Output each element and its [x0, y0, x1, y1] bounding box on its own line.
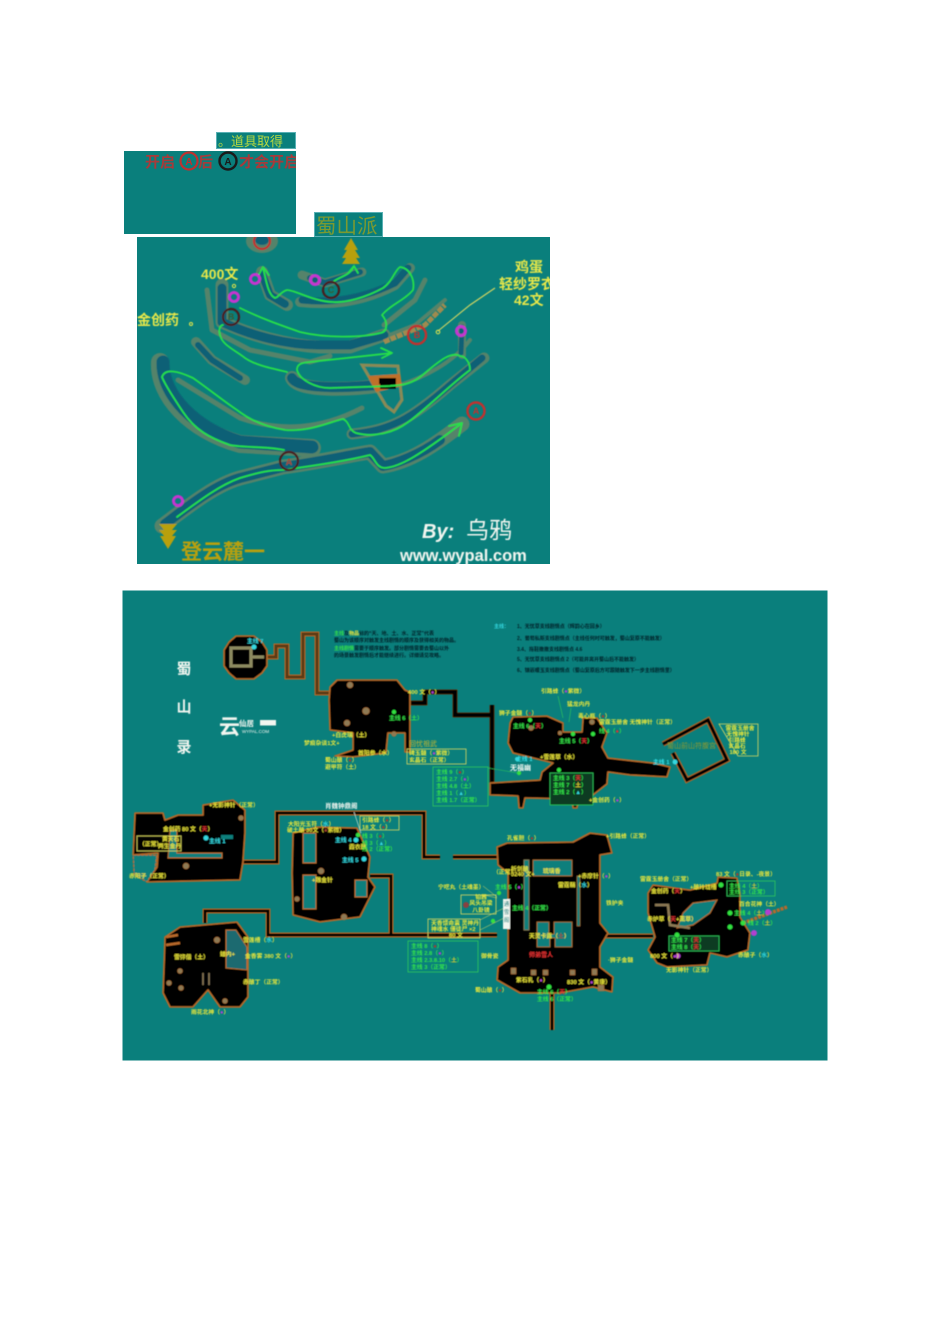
author signature: 乌鸦 — [466, 517, 512, 543]
room: upper west hall: 避甲符（土） — [325, 763, 360, 771]
switch markers: C — [328, 285, 335, 295]
room: upper central hall: 主线 1 — [653, 758, 670, 766]
room: central castle: 紫石乳（●） — [516, 976, 549, 984]
map title — [176, 661, 192, 756]
room: round chamber — [224, 636, 267, 679]
room: west hall — [129, 800, 358, 882]
room: upper west hall: 梦痕杂谈1文+ — [304, 739, 340, 747]
room: east cave: 线 2（土） — [748, 919, 776, 927]
room: upper central hall: 无福幽 — [510, 763, 531, 772]
room: east cave: 主线 3（正常） — [729, 888, 769, 896]
panel: item acquisition label: 。道具取得 — [218, 134, 283, 149]
room: central west hall: 主线 4 — [335, 836, 352, 844]
room: central castle: 风头吊梁 — [469, 899, 493, 907]
map title: 山 — [176, 699, 192, 716]
room: east cave: 赤酿子（水） — [738, 951, 773, 959]
room: central west hall: 线 3（●） — [362, 832, 388, 840]
item labels: 42文 — [514, 292, 544, 308]
room: east cave: 800 文（●） — [650, 952, 682, 960]
room: central castle: 阁 — [504, 916, 509, 924]
room: upper central hall: 毒心瓶（●） — [578, 712, 611, 720]
room: east cave: 主线 8（天） — [671, 943, 705, 951]
room: central castle: 3240 文+ — [511, 870, 535, 878]
room: upper central hall: 主线 1 — [516, 755, 533, 763]
panel: switch note: 开启 — [145, 154, 175, 171]
site logo: WYPAL.COM — [242, 729, 269, 734]
room: central castle: +赤摩针（●） — [578, 872, 614, 880]
room: central west hall: +雕金针 — [312, 876, 333, 884]
room: east cave: 主线 4（土） — [734, 909, 768, 917]
room: central castle: 天香馈命囊 灵神丹 — [431, 919, 479, 927]
legend text — [334, 630, 459, 659]
room: central castle: 铂茜 — [475, 893, 487, 901]
site logo — [219, 716, 276, 739]
map title: 录 — [176, 739, 192, 756]
room: central castle: 师弟雪人 — [529, 951, 553, 959]
branch quest notes — [494, 623, 675, 674]
room: west hall: 肖魏钟鼎阁 — [325, 801, 358, 810]
room: south-west cave: 金香雾 380 文（●） — [245, 952, 296, 960]
room: east cave: +酿玲珑槽 — [690, 883, 717, 891]
room: upper central hall: 主线 3（天） — [553, 774, 587, 782]
room: south-west cave — [163, 922, 296, 1016]
item labels: 金创药 — [137, 312, 179, 328]
room: east cave: 无影神针（正常） — [666, 966, 712, 974]
room: central west hall: 主线 5 — [342, 856, 359, 864]
room: upper west hall: 回忧祖武 — [409, 739, 437, 748]
room: central west hall: 18 文（●） — [362, 823, 391, 831]
room: central castle: 主线 4（正常） — [512, 904, 552, 912]
room: central castle: 蜀山酿（●） — [475, 986, 508, 994]
author signature: By: — [422, 521, 454, 543]
room: south-west cave: 赤酿丁（正常） — [243, 978, 284, 986]
item labels: 轻纱罗衣 — [499, 276, 555, 292]
legend text: 蜀山为该顺序对触发主线剧情的顺序及获得相关的物品。 — [334, 637, 459, 644]
room: upper west hall: 主线 2.7（●） — [436, 775, 472, 783]
legend text: 主线剧情需要于顺序触发。部分剧情需要去蜀山以外 — [334, 645, 449, 652]
room: west hall: （正常） — [139, 840, 162, 848]
corridors — [205, 634, 787, 1030]
room: central west hall: 线 3（▲） — [362, 839, 390, 847]
legend text: 主线及物品标的“天、地、土、水、正常”代表 — [334, 630, 434, 637]
room: central west hall: 线 2（正常） — [362, 845, 396, 853]
room: upper central hall: 引路蜂（●紫微） — [541, 687, 585, 695]
room: central castle: +引路蜂（正常） — [606, 832, 650, 840]
room: central castle: 神魂水 僵徒尸 ×2 — [431, 925, 476, 933]
up arrow to Shushan — [342, 238, 360, 264]
branch quest notes: 2、葡萄私斯支线剧情点（主线任何时可触发，蜀山复原不能触发） — [517, 635, 665, 642]
room: upper west hall: 首阳参（水） — [358, 749, 393, 757]
site logo: 云 — [219, 716, 240, 739]
room: upper central hall: 主线 2（▲） — [553, 788, 587, 796]
room: upper central hall: 雷霆玉册舍 无愧神针（正常） — [599, 718, 676, 726]
item labels: 400文 — [201, 266, 238, 282]
room: central castle: （正常） — [493, 868, 516, 876]
room: central castle: 雷霆鞘（水） — [558, 881, 593, 889]
room: central castle: 主线 5（●） — [495, 883, 527, 891]
room: west hall: 赤阳子（正常） — [129, 872, 170, 880]
room: upper west hall — [304, 680, 488, 806]
room: central west hall: 破土酿 30文（●紫微） — [287, 826, 345, 834]
room: round chamber: 主线 7 — [247, 637, 263, 645]
panel: mountain path map — [137, 229, 555, 565]
room: upper central hall: 180 文 — [729, 748, 747, 756]
branch quest notes: 5、无忧草支线剧情点 2（可能井离开蜀山后不能触发） — [517, 656, 639, 663]
room: upper central hall: 线 4（●） — [599, 727, 625, 735]
room: upper central hall: 狮子金髓（●） — [499, 709, 537, 717]
panel: switch note: A — [224, 157, 232, 168]
room: central castle: 八卦镜 — [472, 906, 490, 914]
room: upper west hall: 碑玉髓（●紫微） — [409, 749, 453, 757]
room: upper central hall: 主线 7（土） — [553, 781, 587, 789]
room: upper west hall: 主线 9（●） — [436, 768, 468, 776]
room: central castle: 830 文（●黄康） — [567, 978, 611, 986]
room: upper west hall: 蜀山酿（●） — [325, 756, 358, 764]
room: central castle: 铁护夹 — [606, 899, 624, 907]
room: central west hall — [287, 812, 399, 922]
map title: 蜀 — [176, 661, 192, 678]
down arrow to Dengyun — [159, 524, 265, 564]
room: east cave: 83 文（●日录、-夜景） — [716, 870, 776, 878]
room: central castle: 雪 — [504, 909, 510, 916]
branch quest notes: 6、镶嵌暖玉支线剧情点（蜀山复原后方可跟随触发下一步主线剧情里） — [517, 667, 675, 674]
room: central castle: ·狮子金髓 — [608, 956, 633, 964]
room: central castle: 主线 8（●） — [411, 942, 443, 950]
branch quest notes: 3.4、拖鞋撒撒支线剧情点 4.6 — [517, 646, 583, 653]
panel: Shushan sect title: 蜀山派 — [316, 215, 378, 238]
room: east cave: 金创药（天） — [651, 887, 686, 895]
panel: switch note: 后 — [198, 154, 213, 171]
room: central west hall: 引路蜂（●） — [362, 816, 395, 824]
room: central castle: 通 — [504, 900, 510, 908]
panel: Shushan full map — [122, 590, 828, 1060]
room: central castle — [408, 832, 650, 1003]
room: central castle: 孔雀胆（●） — [507, 834, 540, 842]
room: upper central hall: 主线 6（天） — [513, 722, 547, 730]
room: upper west hall: 主线 1.7（正常） — [436, 796, 480, 804]
site logo: 仙居 — [239, 718, 254, 728]
panel: switch note — [124, 151, 299, 234]
room: upper central hall: 玄晶石 — [728, 742, 746, 750]
room: west hall: 黄天石 — [162, 835, 180, 843]
branch quest notes: 1、无忧草支线剧情点（辉韵心在回乡） — [517, 623, 605, 630]
room: central castle: 御骨瓷 — [481, 952, 499, 960]
room: central west hall: 霞衣酿 — [349, 843, 367, 851]
switch markers: A — [473, 406, 480, 416]
room: upper central hall: 蜀山前山符腹宫 — [667, 741, 716, 750]
room: west hall: +无影神针（正常） — [209, 801, 259, 809]
branch quest notes: 主线： — [494, 623, 509, 630]
switch markers: A — [286, 457, 293, 467]
room: central castle: 主线 2.3.8.10（土） — [411, 956, 463, 964]
panel: switch note: A — [185, 157, 193, 168]
switch markers: B — [414, 330, 421, 340]
room: east cave: 雷霆玉册舍（正常） — [640, 875, 692, 883]
room: west hall: 两生金丹 — [158, 842, 181, 850]
room: west hall: 主线 1 — [209, 837, 226, 845]
room: east cave — [640, 870, 780, 974]
room: upper west hall: 主线 1（▲） — [436, 789, 470, 797]
switch markers: B — [228, 312, 235, 322]
green route — [162, 266, 470, 517]
room: central castle: 天灵卡露（土） — [529, 932, 570, 940]
room: central castle: 琉璃香 — [543, 867, 561, 875]
room: upper central hall — [488, 687, 758, 808]
room: east cave: 赤炉草（天+熏草） — [647, 915, 697, 923]
room: east cave: 百合花神（土） — [739, 900, 780, 908]
down arrow to Dengyun: 登云麓一 — [181, 541, 265, 564]
room: central castle: 主线 6（天） — [537, 988, 571, 996]
magenta markers — [174, 274, 466, 506]
terrain bands — [160, 229, 484, 526]
room: upper central hall: 主线 5（天） — [559, 737, 593, 745]
author signature: www.wypal.com — [399, 547, 527, 565]
room: upper central hall: +雪莲草（水） — [540, 753, 578, 761]
switch markers — [223, 233, 484, 470]
legend text: 的场景触发剧情后才能继续进行。详细请见攻略。 — [334, 652, 444, 659]
room: upper west hall: 主线 4.8（土） — [436, 782, 475, 790]
room: upper west hall: 玄晶石（正常） — [409, 756, 450, 764]
room: upper west hall: +白虎瑞（土） — [332, 731, 370, 739]
room: south-west cave: 雨花北神（●） — [191, 1008, 229, 1016]
room: south-west cave: 雪莲槽（水） — [243, 936, 278, 944]
room: central castle: 主线 3（正常） — [411, 963, 451, 971]
room: upper west hall: 400 文（●） — [408, 688, 440, 696]
room: central castle: 折剑酿 — [511, 865, 529, 873]
room: central castle: 主线 2.8（●） — [411, 949, 447, 957]
room: upper central hall: 雷霆玉册舍 — [726, 724, 755, 732]
room: upper central hall: 无愧神针 — [726, 730, 750, 738]
room: central castle: 80 文 — [449, 931, 463, 939]
room: east cave: 主线 4（土） — [729, 882, 763, 890]
room: upper central hall: +金创药（●） — [589, 796, 625, 804]
room: upper west hall: 主线 6（土） — [389, 714, 423, 722]
room: east cave: 主线 7（天） — [671, 936, 705, 944]
room: west hall: 金创药 80 文（天） — [163, 825, 213, 833]
room: central castle: 宁呓丸（土魂墨） — [438, 883, 484, 891]
panel: switch note: 才会开启 — [239, 153, 299, 171]
room: central west hall: 大阳光玉符（水） — [288, 820, 334, 828]
author signature — [399, 517, 527, 565]
room: central castle: 主线 6（正常） — [537, 995, 577, 1003]
item labels — [137, 259, 555, 334]
room: south-west cave: 蟠内+ — [220, 950, 236, 958]
item labels: 鸡蛋 — [515, 259, 543, 275]
room: upper central hall: 猛龙内丹 — [567, 700, 590, 708]
room: south-west cave: 雪弥偕（土） — [174, 953, 209, 961]
room: upper central hall: 引路蜂 — [728, 736, 746, 744]
